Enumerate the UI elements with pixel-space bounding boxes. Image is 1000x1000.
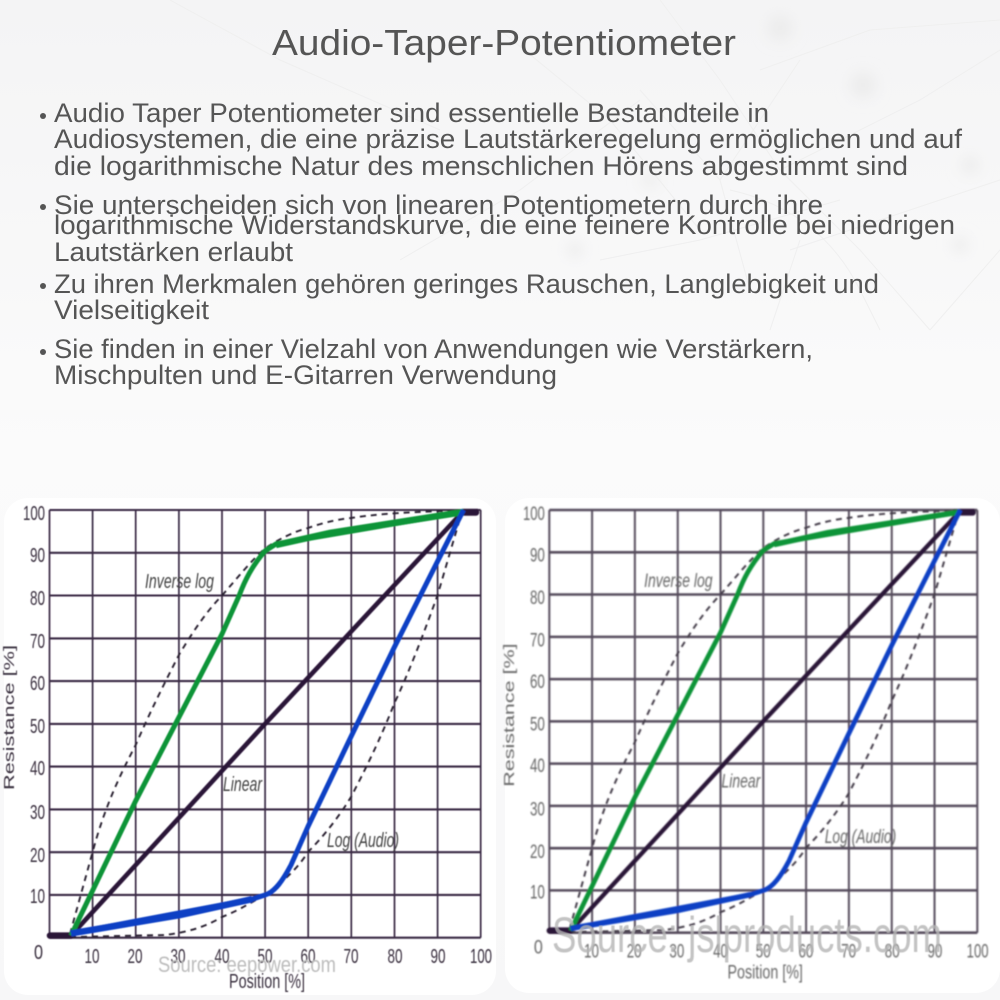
x axis tick labels: 10 [84, 946, 100, 968]
panel: right chart card [505, 498, 1000, 993]
bullet 4: Sie finden in einer Vielzahl von Anwendungen wie Verstärkern, [54, 334, 813, 364]
dashed log curve [70, 512, 462, 937]
y axis tick labels [523, 503, 545, 903]
bullet 2: logarithmische Widerstandskurve, die eine feinere Kontrolle bei niedrigen [54, 210, 955, 240]
y axis tick labels: 90 [530, 544, 545, 566]
y axis tick labels: 70 [30, 631, 45, 653]
dashed log curve [570, 512, 959, 932]
source watermark: Source: eepower.com [158, 952, 336, 977]
bullet 3 [40, 269, 879, 325]
bullet 1: die logarithmische Natur des menschlichen Hörens abgestimmt sind [54, 151, 908, 181]
y axis tick labels: 90 [30, 545, 45, 567]
y axis tick labels: 60 [30, 673, 45, 695]
y axis tick labels: 50 [530, 713, 545, 735]
x axis tick labels: 30 [170, 946, 186, 968]
y axis tick labels: 60 [530, 671, 545, 693]
y axis tick labels: 10 [30, 886, 45, 908]
curve labels: Log (Audio) [327, 830, 399, 852]
y axis title: Resistance [%] [1, 645, 18, 790]
bullet 2 [40, 190, 955, 267]
y axis tick labels: 50 [30, 716, 45, 738]
bullet 3: Vielseitigkeit [54, 295, 210, 325]
x axis tick labels: 80 [885, 941, 900, 963]
x axis tick labels: 90 [430, 946, 446, 968]
curve labels: Linear [722, 771, 761, 793]
bullet 2: Sie unterscheiden sich von linearen Potentiometern durch ihre [54, 190, 823, 220]
x axis tick labels: 80 [388, 946, 402, 968]
x axis tick labels: 100 [967, 941, 989, 963]
curve labels: Inverse log [644, 570, 713, 592]
y axis title: Resistance [%] [502, 643, 518, 787]
panel: left chart card [4, 498, 496, 995]
y axis tick labels: 10 [530, 881, 545, 903]
log audio curve [571, 510, 960, 928]
bullet 4 [40, 334, 813, 390]
curve labels [145, 571, 399, 852]
x axis tick labels: 70 [344, 946, 358, 968]
x axis tick labels: 40 [713, 941, 728, 963]
right chart: resistance vs position [502, 503, 989, 983]
background network texture [170, 0, 1000, 330]
x axis tick labels: 60 [798, 941, 813, 963]
left chart: resistance vs position [1, 503, 492, 993]
x axis tick labels: 0 [34, 942, 43, 964]
dashed inverse log curve [70, 511, 462, 934]
title: Audio-Taper-Potentiometer [272, 22, 736, 63]
curve labels: Log (Audio) [825, 826, 896, 848]
bullet 2: Lautstärken erlaubt [54, 237, 294, 267]
y axis tick labels: 80 [30, 588, 45, 610]
log audio curve [71, 510, 464, 933]
curve labels: Linear [223, 774, 263, 796]
y axis tick labels: 70 [530, 629, 545, 651]
curve labels [644, 570, 896, 848]
bullet 1: Audio Taper Potentiometer sind essentielle Bestandteile in [54, 98, 769, 128]
y axis tick labels: 30 [530, 798, 545, 820]
x axis tick labels: 90 [927, 941, 942, 963]
dashed inverse log curve [570, 511, 959, 929]
x axis tick labels: 40 [214, 946, 230, 968]
x axis title: Position [%] [229, 971, 305, 993]
y axis tick labels: 100 [523, 503, 545, 525]
y axis tick labels: 100 [23, 503, 45, 525]
grid [549, 510, 977, 933]
x axis tick labels: 70 [841, 941, 856, 963]
y axis tick labels: 20 [530, 841, 545, 863]
bullet 4: Mischpulten und E-Gitarren Verwendung [54, 360, 557, 390]
x axis tick labels: 30 [669, 941, 684, 963]
bullet 1 [40, 98, 963, 181]
x axis tick labels [34, 942, 492, 968]
x axis tick labels [534, 937, 989, 963]
x axis tick labels: 60 [300, 946, 316, 968]
x axis tick labels: 10 [584, 941, 599, 963]
bullet 3: Zu ihren Merkmalen gehören geringes Rauschen, Langlebigkeit und [54, 269, 879, 299]
grid [50, 510, 481, 938]
linear curve [50, 511, 478, 936]
x axis tick labels: 0 [534, 937, 543, 959]
x axis tick labels: 100 [470, 946, 492, 968]
bullet list [40, 98, 963, 390]
y axis tick labels: 40 [30, 758, 45, 780]
linear curve [550, 511, 975, 931]
x axis tick labels: 50 [756, 941, 771, 963]
y axis tick labels: 80 [530, 587, 545, 609]
inverse log curve [71, 512, 464, 936]
y axis tick labels [23, 503, 45, 908]
y axis tick labels: 40 [530, 755, 545, 777]
x axis title: Position [%] [727, 961, 803, 983]
y axis tick labels: 30 [30, 802, 45, 824]
inverse log curve [571, 512, 960, 931]
bullet 1: Audiosystemen, die eine präzise Lautstärkeregelung ermöglichen und auf [54, 124, 963, 154]
curve labels: Inverse log [145, 571, 214, 593]
x axis tick labels: 20 [627, 941, 642, 963]
x axis tick labels: 20 [128, 946, 142, 968]
y axis tick labels: 20 [30, 845, 45, 867]
x axis tick labels: 50 [258, 946, 272, 968]
